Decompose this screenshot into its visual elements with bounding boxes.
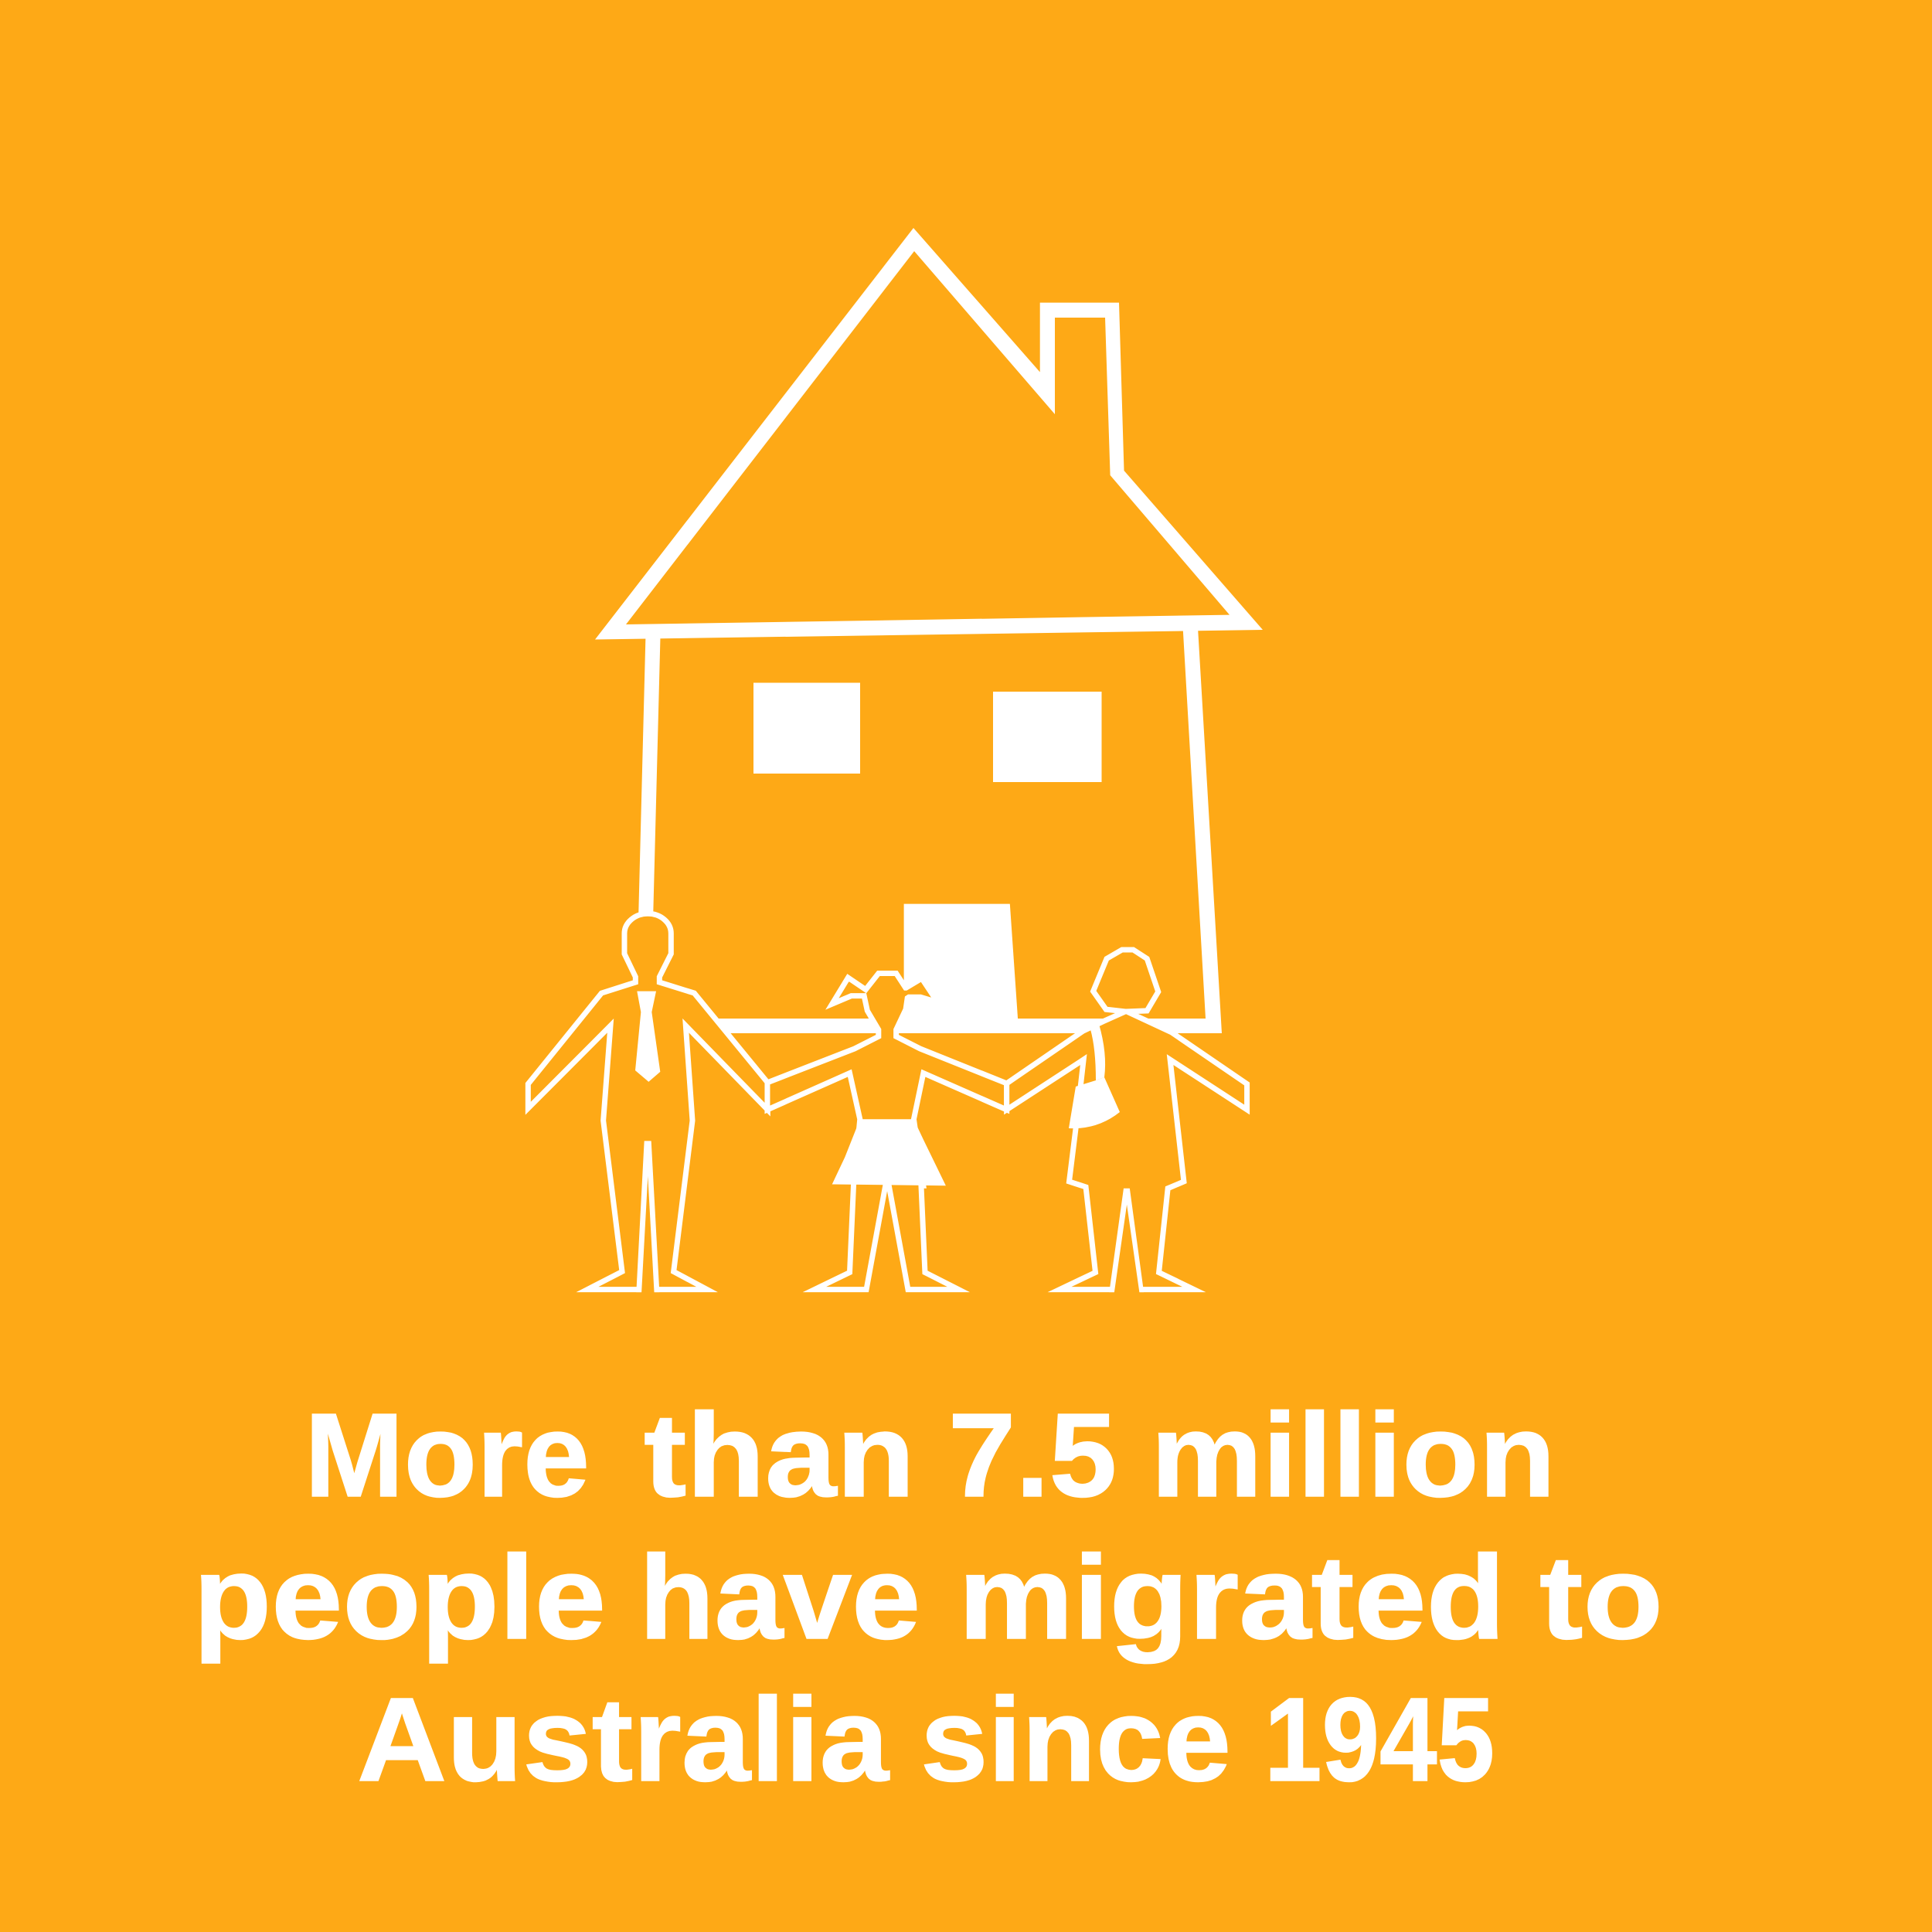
handbag strap [1090,1024,1105,1080]
headline line 2: to [1539,1531,1663,1664]
headline line 1: More [304,1389,590,1522]
house roof and chimney outline [595,228,1263,640]
headline line 1: 7.5 [948,1389,1117,1522]
gap between woman's legs [1114,1205,1140,1294]
girl skirt [832,1119,946,1185]
headline text [193,1389,1663,1806]
figure: girl with pigtails and skirt [767,973,1007,1290]
headline line 1: million [1151,1389,1556,1522]
headline line 2: have [639,1531,920,1664]
woman body outline [1007,950,1247,1294]
house left wall [638,634,661,921]
figure: woman with handbag [1007,950,1247,1294]
headline line 3: 1945 [1264,1673,1495,1806]
headline line 2: people [193,1531,606,1664]
house right wall and floor [715,628,1222,1033]
headline line 2 [193,1531,1663,1664]
gap between man's legs [641,1176,655,1294]
house door [904,904,1018,1020]
headline line 1: than [644,1389,915,1522]
figure: man with tie [528,913,767,1294]
headline line 3: Australia [357,1673,889,1806]
headline line 1 [304,1389,1556,1522]
handbag [1069,1077,1120,1128]
woman inner leg join [1109,1189,1144,1292]
house right window [993,692,1102,782]
illustration: family holding up a house [528,228,1263,1294]
man tie [635,992,660,1082]
girl body outline [767,973,1007,1290]
headline line 3: since [920,1673,1231,1806]
man body outline [528,913,767,1290]
house left window [753,683,860,774]
man inner leg join [636,1141,659,1292]
headline line 3 [357,1673,1495,1806]
girl right pigtail interior [904,982,931,998]
icon: house [595,228,1263,1033]
headline line 2: migrated [958,1531,1505,1664]
